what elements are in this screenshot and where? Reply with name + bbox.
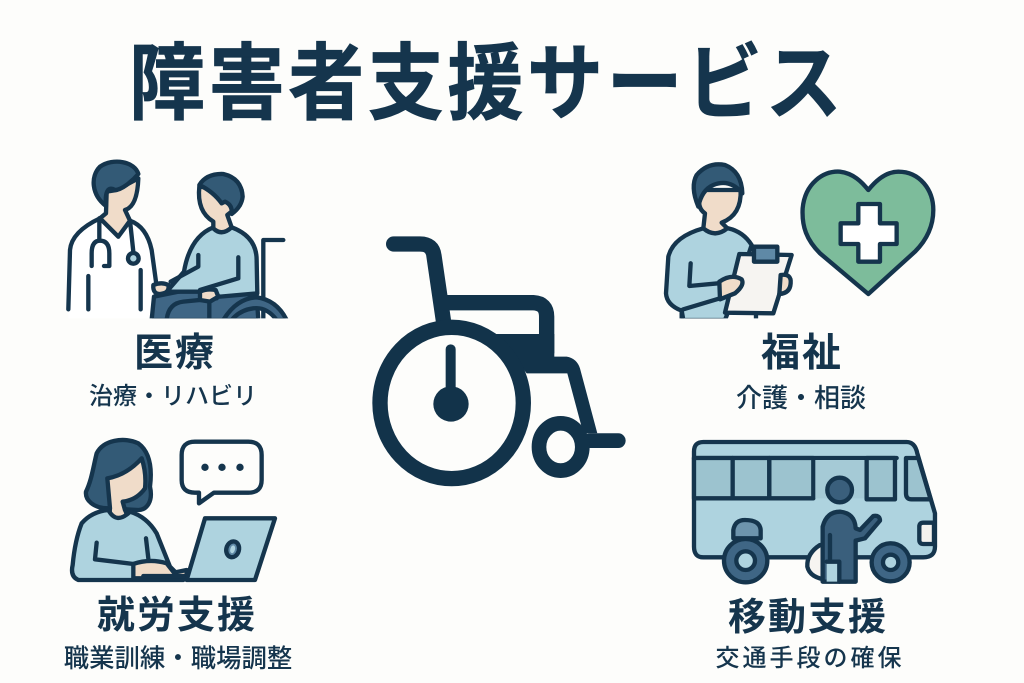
icon: woman at laptop with speech bubble <box>72 440 275 580</box>
icon: welfare worker with clipboard <box>666 164 792 320</box>
heading: mobility support: 移動支援 <box>728 597 888 639</box>
icon: central wheelchair <box>380 244 618 479</box>
icon: heart with cross <box>803 172 933 294</box>
text: employment detail: 職業訓練・職場調整 <box>64 645 292 673</box>
text: mobility detail: 交通手段の確保 <box>716 645 904 672</box>
heading: welfare: 福祉 <box>761 332 843 375</box>
title: 障害者支援サービス <box>129 38 845 131</box>
text: welfare detail: 介護・相談 <box>736 383 866 413</box>
icon: bus and passenger <box>694 442 935 582</box>
heading: medical: 医療 <box>134 332 216 375</box>
icon: doctor and wheelchair patient <box>68 162 287 320</box>
text: medical detail: 治療・リハビリ <box>89 383 257 410</box>
heading: employment support: 就労支援 <box>97 595 257 637</box>
